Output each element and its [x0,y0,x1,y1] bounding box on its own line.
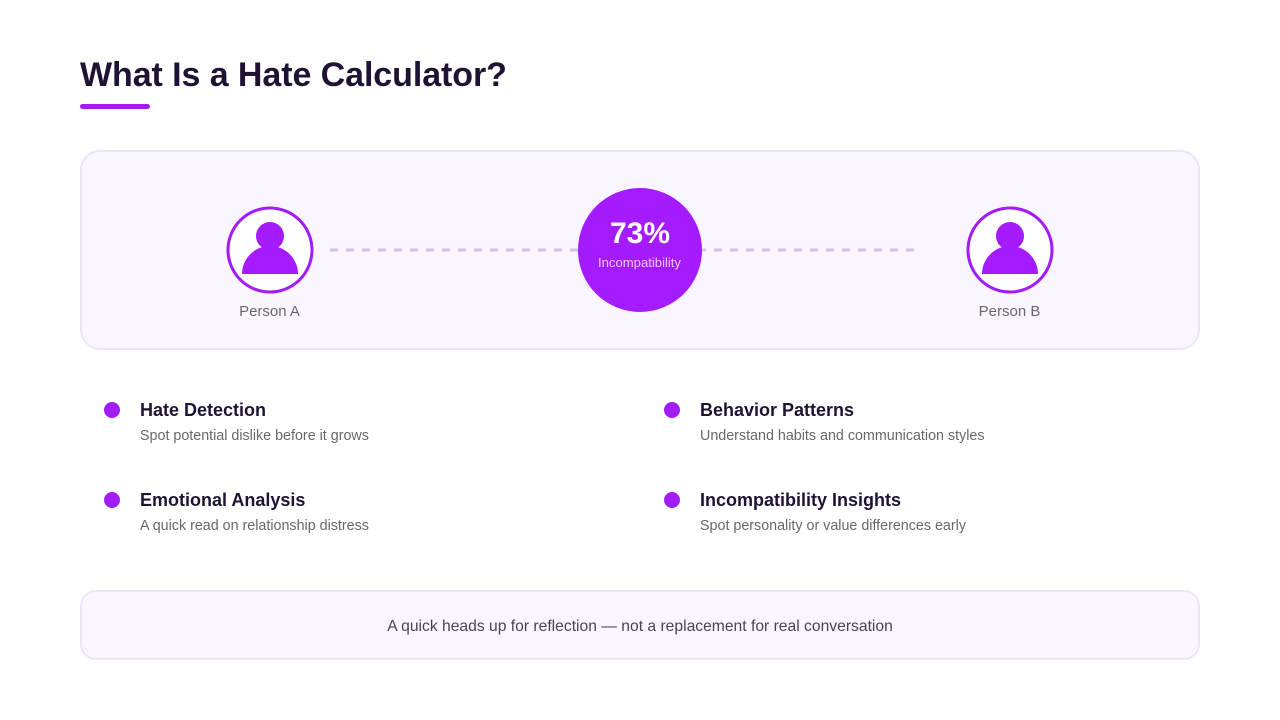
feature: Incompatibility Insights: Spot personality or value differences early [700,518,966,534]
feature: Emotional Analysis: Emotional Analysis [140,490,305,510]
score circle: 73% incompatibility [578,188,702,312]
feature: Hate Detection: Hate Detection [140,400,266,420]
dashed connector line [330,248,914,252]
icon: Person B avatar [966,206,1054,294]
feature: Emotional Analysis: A quick read on relationship distress [140,518,369,534]
feature: Incompatibility Insights: Incompatibility Insights [700,490,901,510]
title: What Is a Hate Calculator? [80,56,507,94]
panel: comparison diagram [80,150,1200,350]
icon: Person A avatar [226,206,314,294]
feature: Behavior Patterns: Behavior Patterns [700,400,854,420]
feature: Behavior Patterns [664,400,984,444]
label: Person B: Person B [979,303,1040,320]
score label: Incompatibility [598,255,681,270]
title underline [80,104,150,109]
feature: Emotional Analysis [104,490,369,534]
feature: Behavior Patterns: Understand habits and communication styles [700,428,984,444]
label: Person A: Person A [239,303,300,320]
feature: Incompatibility Insights [664,490,966,534]
footer callout: A quick heads up for reflection — not a replacement for real conversation [387,618,893,635]
feature: Hate Detection: Spot potential dislike before it grows [140,428,369,444]
footer callout [80,590,1200,660]
score value: 73% [610,217,670,250]
feature: Hate Detection [104,400,369,444]
